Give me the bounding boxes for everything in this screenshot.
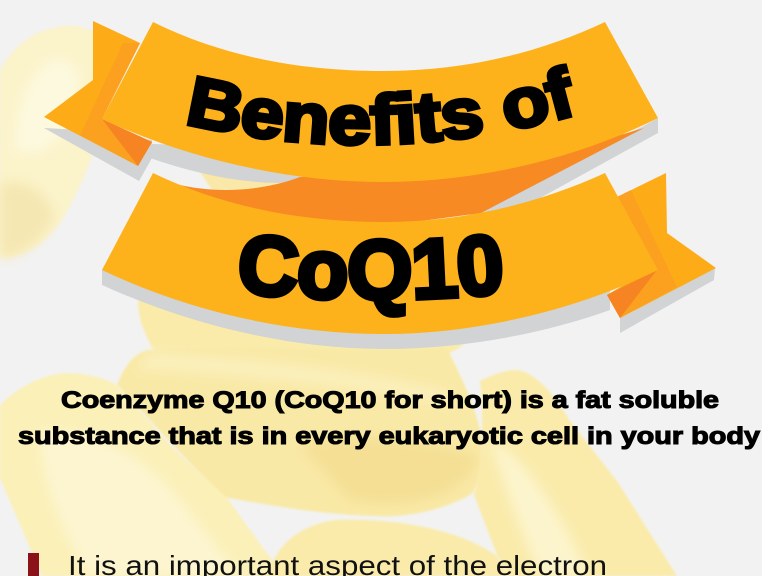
heading: CoQ10: CoQ10: [239, 233, 502, 318]
intro text: Coenzyme Q10 (CoQ10 for short) is a fat soluble: [61, 387, 719, 414]
banner: top: [102, 22, 658, 182]
ribbon fold: orange connector: [180, 128, 644, 226]
banner: bottom: [102, 173, 658, 334]
bullet marker: [28, 553, 39, 576]
capsule: centre horizontal: [117, 348, 482, 516]
intro text: [18, 387, 761, 450]
ribbon tail: bottom right: [607, 173, 716, 318]
capsule: lower left diagonal: [0, 373, 285, 576]
capsule: bottom centre: [268, 520, 510, 576]
banner shadows: [44, 118, 715, 349]
ribbon tail: top left: [44, 21, 152, 166]
capsule: behind banners: [138, 172, 490, 360]
capsule: right diagonal: [474, 370, 677, 576]
intro text: substance that is in every eukaryotic cell in your body: [18, 423, 761, 450]
capsule: top left: [0, 26, 110, 258]
heading: Benefits of: Benefits of: [186, 63, 573, 147]
